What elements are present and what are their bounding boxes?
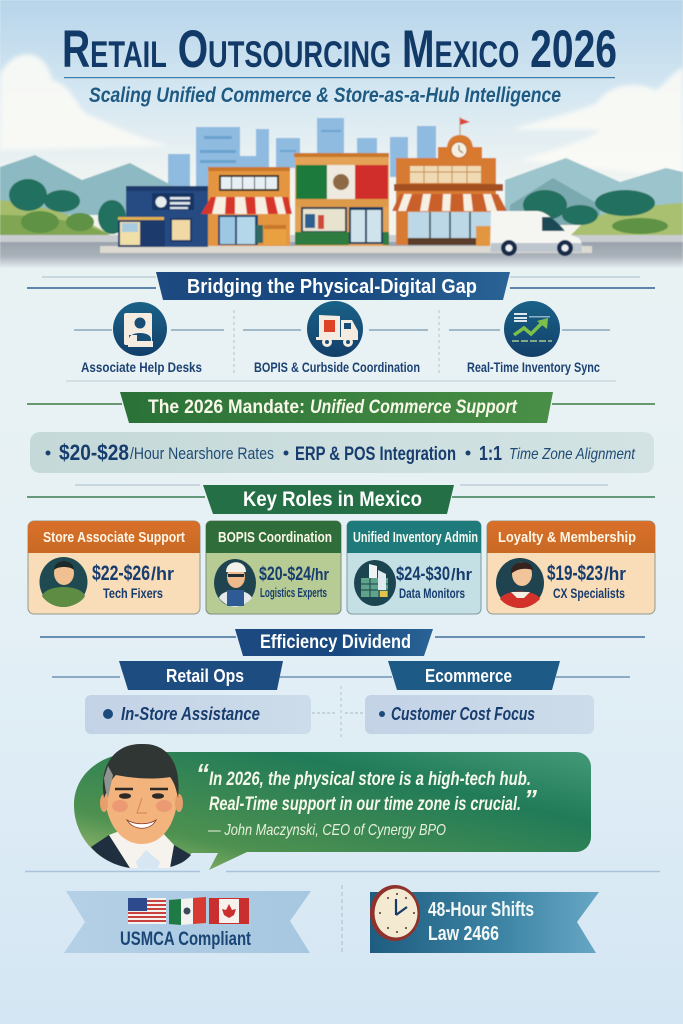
speech bubble <box>74 752 591 870</box>
column heading: Retail Ops <box>119 661 283 690</box>
quote text <box>196 758 537 839</box>
column heading: Ecommerce <box>388 661 560 690</box>
card: Loyalty & Membership: CX Specialists <box>553 585 625 601</box>
card: Unified Inventory Admin: Unified Inventory Admin <box>353 530 478 546</box>
quote text: Real-Time support in our time zone is crucial. <box>209 794 521 815</box>
avatar: tech fixer <box>40 557 88 607</box>
trees <box>9 179 655 234</box>
icon: wall clock <box>370 885 420 941</box>
quote text: In 2026, the physical store is a high-tech hub. <box>209 769 531 790</box>
ribbon: USMCA Compliant: USMCA Compliant <box>120 929 252 950</box>
pill: In-Store Assistance: In-Store Assistance <box>121 704 260 724</box>
column heading: Retail Ops: Retail Ops <box>166 666 244 686</box>
heading banner: The 2026 Mandate: The 2026 Mandate: <box>148 397 305 418</box>
city skyline <box>168 118 436 188</box>
quote callout <box>74 744 591 870</box>
heading banner: Efficiency Dividend <box>235 629 433 656</box>
road and sidewalk <box>0 235 683 243</box>
icon: delivery truck <box>307 301 363 357</box>
panel: key rates and integration: ERP & POS Integration <box>295 444 456 465</box>
column heading: Ecommerce: Ecommerce <box>425 666 512 686</box>
subtitle: Scaling Unified Commerce & Store-as-a-Hub Intelligence <box>89 84 561 107</box>
ribbon: USMCA Compliant <box>64 891 311 953</box>
heading banner: Key Roles in Mexico <box>203 485 454 514</box>
panel: key rates and integration: $20-$28 <box>59 440 129 465</box>
section: Key Roles in Mexico <box>27 485 655 614</box>
title rule <box>64 77 615 78</box>
card: BOPIS Coordination: Logistics Experts <box>260 585 327 600</box>
card: Store Associate Support: Tech Fixers <box>103 585 163 601</box>
heading banner: Efficiency Dividend: Efficiency Dividend <box>260 632 411 653</box>
card: Store Associate Support: Store Associate Support <box>43 530 185 546</box>
label: BOPIS & Curbside Coordination: BOPIS & Curbside Coordination <box>254 359 420 375</box>
avatar: data monitor <box>354 560 396 606</box>
card: BOPIS Coordination: /hr <box>311 565 329 584</box>
card: BOPIS Coordination: BOPIS Coordination <box>218 530 332 546</box>
store: orange awning shop <box>201 167 292 246</box>
mountains <box>0 155 175 215</box>
panel: key rates and integration <box>30 432 654 473</box>
icon: Mexico flag <box>169 897 206 925</box>
divider line under quote <box>25 870 660 872</box>
icon: inventory trend <box>504 301 560 357</box>
heading banner: Key Roles in Mexico: Key Roles in Mexico <box>243 488 422 511</box>
card: Store Associate Support <box>28 521 200 614</box>
quote text: “ <box>196 758 209 788</box>
section: Bridging the Physical-Digital Gap <box>27 272 655 381</box>
card: Loyalty & Membership <box>487 521 655 614</box>
panel: key rates and integration: Time Zone Alignment <box>509 446 635 463</box>
heading banner: The 2026 Mandate <box>120 392 553 423</box>
heading banner: Bridging the Physical-Digital Gap: Bridging the Physical-Digital Gap <box>187 276 477 298</box>
pill: In-Store Assistance <box>85 695 311 734</box>
label: Associate Help Desks: Associate Help Desks <box>81 359 202 375</box>
card: BOPIS Coordination: $20-$24 <box>259 564 311 585</box>
portrait: John Maczynski <box>91 744 191 868</box>
pill: Customer Cost Focus: Customer Cost Focus <box>391 704 535 724</box>
avatar: logistics expert <box>214 559 256 607</box>
card: Loyalty & Membership: /hr <box>604 564 626 584</box>
quote text: ” <box>524 784 537 814</box>
card: Unified Inventory Admin: Data Monitors <box>399 586 465 601</box>
card: Unified Inventory Admin <box>347 521 481 614</box>
icon: USA flag <box>128 898 166 924</box>
store: Mexican flag shop <box>294 153 389 246</box>
icon: associate help desk <box>113 302 167 356</box>
card: Unified Inventory Admin: /hr <box>451 565 472 584</box>
section: The 2026 Mandate <box>27 392 655 473</box>
ribbon: 48-Hour Shifts Law 2466 <box>370 885 599 953</box>
panel: key rates and integration: 1:1 <box>479 443 502 465</box>
pill: Customer Cost Focus <box>365 695 594 734</box>
ribbon: 48-Hour Shifts Law 2466: Law 2466 <box>428 923 499 945</box>
icon: Canada flag <box>209 898 249 924</box>
hills <box>0 200 112 236</box>
panel: key rates and integration: /Hour Nearshore Rates <box>130 444 274 463</box>
ribbon: 48-Hour Shifts Law 2466: 48-Hour Shifts <box>428 899 534 921</box>
section: Efficiency Dividend <box>40 629 645 737</box>
heading banner: The 2026 Mandate: Unified Commerce Support <box>310 397 518 418</box>
card: Loyalty & Membership: $19-$23 <box>547 562 603 585</box>
card: Unified Inventory Admin: $24-$30 <box>396 564 450 585</box>
avatar: CX specialist <box>496 558 544 608</box>
label: Real-Time Inventory Sync: Real-Time Inventory Sync <box>467 359 600 375</box>
delivery van <box>490 211 582 256</box>
card: BOPIS Coordination <box>206 521 341 614</box>
store: blue help desk <box>118 186 208 247</box>
card: Loyalty & Membership: Loyalty & Membership <box>498 530 636 546</box>
store: clock tower shop <box>392 117 507 246</box>
quote text: — John Maczynski, CEO of Cynergy BPO <box>207 822 446 839</box>
card: Store Associate Support: /hr <box>151 564 174 584</box>
hero illustration: storefront street <box>0 0 683 268</box>
card: Store Associate Support: $22-$26 <box>92 562 150 585</box>
